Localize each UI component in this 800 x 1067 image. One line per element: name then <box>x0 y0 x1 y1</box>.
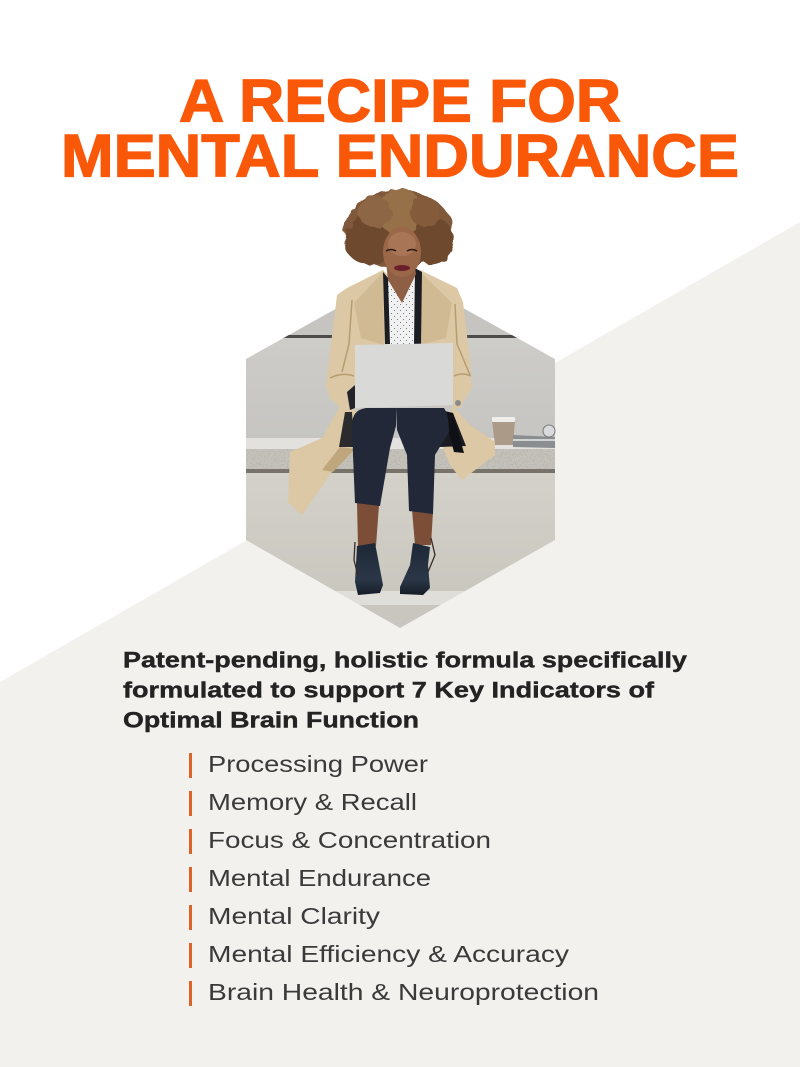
neck <box>386 262 416 303</box>
face <box>383 227 421 277</box>
title: A RECIPE FOR <box>179 68 621 134</box>
coat tail right <box>440 406 495 480</box>
background: grey diagonal panel <box>0 222 800 1067</box>
list item: Mental Endurance: Mental Endurance <box>208 865 431 891</box>
laptop <box>355 343 453 408</box>
scarf strips <box>383 268 422 344</box>
coat body <box>326 270 472 408</box>
intro text: Optimal Brain Function <box>123 708 419 732</box>
shins <box>357 503 433 546</box>
list item: Focus & Concentration: Focus & Concentration <box>208 827 491 853</box>
ankle boots <box>354 538 435 595</box>
list of 7 key indicators <box>189 751 599 1006</box>
sleeve shadows <box>330 300 471 378</box>
wrist watch <box>455 400 461 406</box>
shirt <box>385 275 417 345</box>
intro text: Patent-pending, holistic formula specifically <box>123 648 688 672</box>
coat tail left <box>288 406 356 515</box>
list item: Mental Clarity: Mental Clarity <box>208 903 380 929</box>
title: MENTAL ENDURANCE <box>61 122 739 190</box>
photo: woman sitting with laptop <box>288 189 555 595</box>
dark coat lining <box>339 412 354 447</box>
trousers <box>352 408 449 514</box>
coat lapels <box>354 272 452 345</box>
list item: Mental Efficiency & Accuracy: Mental Efficiency & Accuracy <box>208 941 569 967</box>
books and watch on ledge <box>513 425 555 448</box>
list item: Memory & Recall: Memory & Recall <box>208 789 417 815</box>
hair <box>344 189 454 268</box>
hexagon photo background: concrete steps <box>246 308 555 628</box>
title <box>61 68 739 190</box>
list item: Processing Power: Processing Power <box>208 751 428 777</box>
intro text <box>123 648 688 732</box>
list item: Brain Health & Neuroprotection: Brain Health & Neuroprotection <box>208 979 599 1005</box>
coffee cup <box>492 417 515 445</box>
intro text: formulated to support 7 Key Indicators of <box>123 678 655 702</box>
